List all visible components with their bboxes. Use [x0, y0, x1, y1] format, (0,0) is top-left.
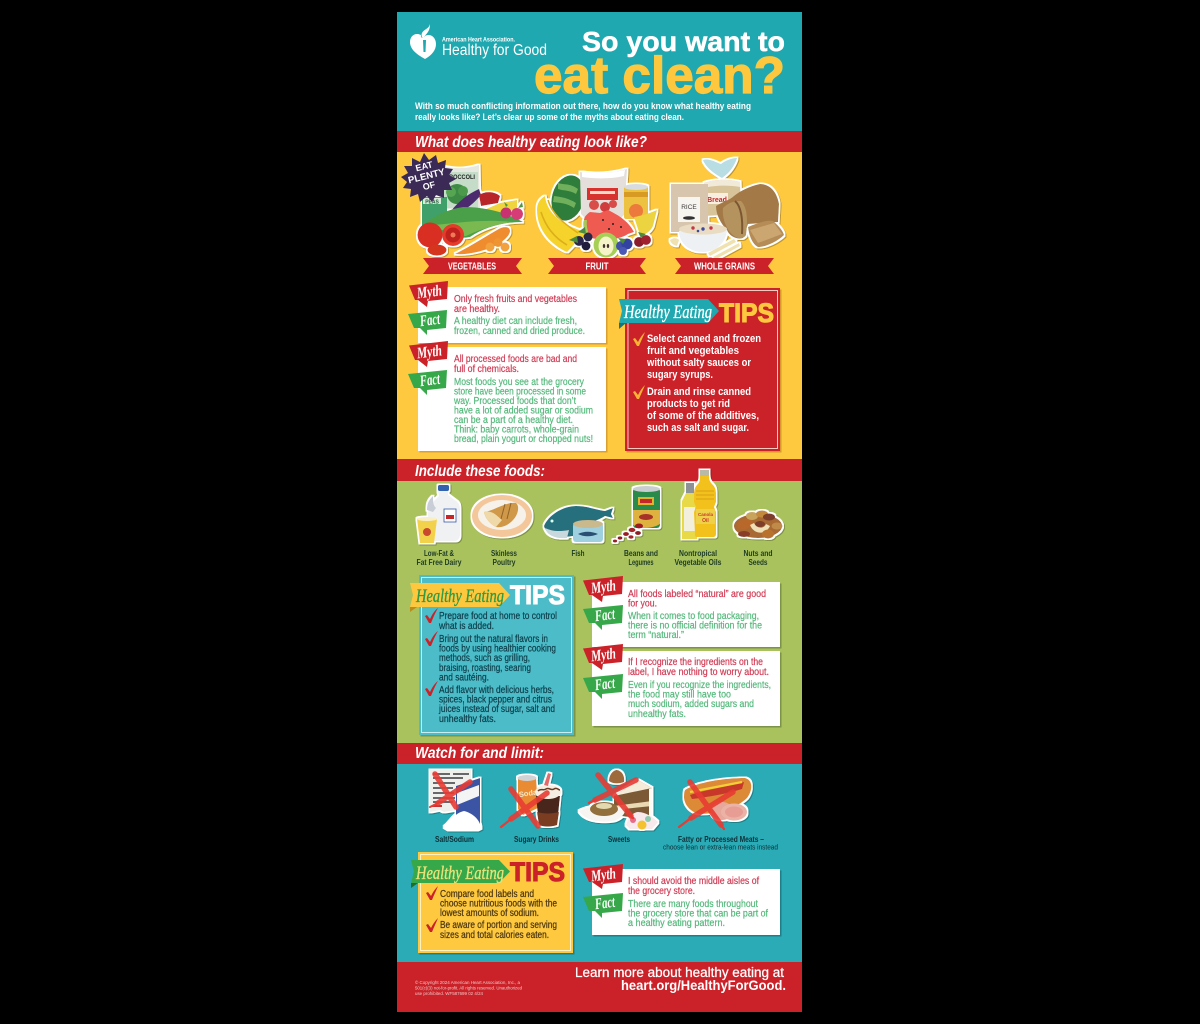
- card text: bread, plain yogurt or chopped nuts!: [454, 434, 593, 445]
- tips text: Compare food labels and: [440, 889, 534, 900]
- badge: eat plenty of: PLENTY: [407, 167, 447, 186]
- panel: myth fact card 2: [408, 341, 608, 452]
- call to action: heart.org/HealthyForGood.: [621, 978, 786, 993]
- section: watch for and limit: [397, 743, 802, 962]
- tips text: lowest amounts of sodium.: [440, 908, 539, 919]
- icon: beans: [613, 486, 660, 542]
- card text: [453, 354, 593, 445]
- tips text: [440, 889, 557, 941]
- card text: the food may still have too: [628, 690, 731, 700]
- tips text: such as salt and sugar.: [647, 422, 749, 434]
- ribbon: vegetables: VEGETABLES: [448, 262, 496, 272]
- myth flag: Myth: [589, 865, 617, 885]
- myth flag: Myth: [415, 282, 443, 302]
- red x: [679, 782, 733, 829]
- card text: [628, 589, 766, 641]
- myth flag: [409, 281, 448, 307]
- panel: tips red: [619, 288, 782, 452]
- labels: food names: Nontropical: [679, 548, 717, 558]
- icon: oils: Oil: [702, 518, 709, 524]
- fact flag: Fact: [418, 371, 441, 390]
- tips banner: TIPS: [719, 298, 774, 328]
- tips banner: [410, 580, 565, 612]
- card text: much sodium, added sugars and: [628, 699, 754, 710]
- labels: limit foods: Sugary Drinks: [514, 834, 559, 844]
- intro text: With so much conflicting information out there, how do you know what healthy eating: [415, 101, 751, 112]
- ribbon: vegetables: [423, 258, 522, 274]
- card text: All processed foods are bad and: [454, 354, 577, 365]
- tips banner: TIPS: [510, 580, 565, 610]
- ribbon: fruit: [548, 258, 646, 274]
- labels: food names: Fat Free Dairy: [416, 557, 462, 567]
- fact flag: Fact: [593, 606, 616, 625]
- card text: When it comes to food packaging,: [628, 611, 759, 622]
- logo text: [442, 36, 547, 59]
- card text: the grocery store.: [628, 886, 695, 897]
- fact flag: Fact: [418, 311, 441, 330]
- badge: eat plenty of: [401, 153, 456, 202]
- icon: vegetables: [418, 165, 523, 256]
- myth flag: [583, 644, 623, 670]
- icon: poultry: [472, 495, 532, 537]
- card text: for you.: [628, 598, 657, 610]
- card text: [628, 876, 768, 929]
- icon: whole grains: Bread: [707, 197, 727, 204]
- copyright: [415, 980, 523, 996]
- header panel: [397, 12, 802, 131]
- call to action: Learn more about healthy eating at: [575, 965, 784, 980]
- card text: way. Processed foods that don’t: [453, 396, 576, 407]
- tips text: Prepare food at home to control: [439, 611, 557, 622]
- tips text: Select canned and frozen: [647, 333, 761, 345]
- ribbon: fruit: FRUIT: [586, 262, 608, 272]
- labels: food names: Legumes: [628, 557, 654, 567]
- checks: [426, 886, 438, 932]
- tips text: and sautéing.: [439, 672, 489, 684]
- tips text: Be aware of portion and serving: [440, 920, 557, 931]
- tips text: what is added.: [438, 621, 494, 632]
- labels: food names: Seeds: [748, 557, 768, 567]
- icon: nuts: [734, 510, 782, 538]
- icon: vegetables: PEAS: [425, 200, 439, 206]
- card text: full of chemicals.: [454, 364, 519, 375]
- tips text: Drain and rinse canned: [647, 386, 751, 398]
- tips text: foods by using healthier cooking: [439, 644, 556, 654]
- labels: limit foods: choose lean or extra-lean meats instead: [663, 842, 778, 852]
- labels: limit foods: Sweets: [608, 834, 630, 844]
- panel: myth fact card 5: [583, 864, 782, 936]
- card text: If I recognize the ingredients on the: [628, 657, 763, 668]
- labels: food names: Poultry: [492, 557, 516, 567]
- card text: Most foods you see at the grocery: [454, 377, 584, 388]
- tips text: [646, 333, 761, 434]
- badge: eat plenty of: EAT: [414, 159, 434, 173]
- logo text: Healthy for Good: [442, 42, 547, 59]
- intro text: really looks like? Let’s clear up some of the myths about eating clean.: [415, 112, 684, 123]
- card text: the grocery store that can be part of: [628, 908, 768, 920]
- copyright: 501(c)(3) not-for-profit. All rights reserved. Unauthorized: [415, 986, 523, 990]
- myth flag: Myth: [589, 577, 617, 597]
- title: So you want to: [582, 26, 785, 57]
- myth flag: [583, 864, 623, 889]
- icon: fish: [544, 506, 613, 542]
- fact flag: [408, 310, 447, 335]
- copyright: use prohibited. WF587699 02 4/24: [415, 991, 484, 996]
- checks: [633, 332, 645, 399]
- tips text: unhealthy fats.: [439, 714, 496, 725]
- tips text: products to get rid: [647, 398, 730, 410]
- tips banner: TIPS: [510, 857, 565, 887]
- labels: limit foods: Fatty or Processed Meats –: [678, 834, 764, 844]
- tips text: without salty sauces or: [646, 357, 752, 369]
- tips banner: [411, 857, 565, 888]
- tips text: Add flavor with delicious herbs,: [439, 685, 554, 696]
- labels: food names: Vegetable Oils: [674, 557, 722, 567]
- card text: A healthy diet can include fresh,: [454, 316, 577, 327]
- tips banner: [619, 298, 774, 329]
- icon: whole grains: [670, 158, 784, 259]
- card text: There are many foods throughout: [628, 899, 758, 910]
- ribbon: whole grains: [675, 258, 774, 274]
- labels: food names: Beans and: [624, 548, 658, 558]
- card text: [454, 294, 585, 337]
- icon: vegetables: BROCCOLI: [445, 174, 475, 181]
- tips text: choose nutritious foods with the: [440, 898, 557, 910]
- icon: oils: [682, 470, 716, 539]
- tips text: fruit and vegetables: [647, 345, 739, 357]
- icon: sugary drinks: Soda: [518, 788, 538, 799]
- labels: food names: Nuts and: [744, 548, 772, 558]
- panel: tips teal: [410, 575, 576, 736]
- ribbon: whole grains: WHOLE GRAINS: [694, 262, 755, 272]
- tips text: Bring out the natural flavors in: [439, 634, 548, 645]
- tips text: juices instead of sugar, salt and: [438, 704, 555, 715]
- tips text: spices, black pepper and citrus: [439, 694, 552, 706]
- tips text: of some of the additives,: [647, 410, 759, 422]
- red x: [430, 774, 470, 807]
- badge: eat plenty of: OF: [422, 179, 437, 192]
- card text: Only fresh fruits and vegetables: [454, 294, 577, 305]
- labels: food names: Fish: [572, 548, 584, 558]
- card text: I should avoid the middle aisles of: [628, 876, 759, 887]
- myth flag: [409, 341, 448, 367]
- panel: myth fact card 3: [583, 576, 782, 648]
- icon: sugary drinks: [501, 773, 561, 827]
- red x: [501, 789, 547, 827]
- icon: sweets: [579, 770, 658, 830]
- icon: oils: Canola: [698, 512, 713, 517]
- card text: All foods labeled “natural” are good: [628, 589, 766, 600]
- fact flag: Fact: [593, 894, 616, 913]
- tips banner: Healthy Eating: [415, 586, 504, 607]
- card text: term “natural.”: [628, 630, 684, 641]
- labels: food names: [416, 548, 772, 567]
- labels: limit foods: [435, 834, 778, 852]
- fact flag: [583, 674, 623, 699]
- icon: dairy: [417, 485, 460, 543]
- card text: frozen, canned and dried produce.: [454, 326, 585, 337]
- card text: there is no official definition for the: [628, 620, 762, 632]
- red x: [589, 775, 636, 818]
- card text: [628, 657, 771, 720]
- card text: Think: baby carrots, whole-grain: [454, 424, 579, 436]
- card text: have a lot of added sugar or sodium: [454, 406, 593, 416]
- copyright: © Copyright 2024 American Heart Association, Inc., a: [415, 980, 521, 985]
- tips text: sugary syrups.: [647, 369, 713, 381]
- card text: can be a part of a healthy diet.: [454, 415, 573, 426]
- tips text: sizes and total calories eaten.: [440, 930, 549, 941]
- call to action: [575, 965, 786, 993]
- panel: tips yellow: [411, 852, 574, 954]
- icon: heart torch logo: [410, 24, 436, 59]
- footer: [397, 962, 802, 1012]
- labels: food names: Low-Fat &: [424, 548, 454, 558]
- myth flag: Myth: [415, 342, 443, 362]
- tips text: methods, such as grilling,: [439, 653, 530, 664]
- fact flag: [583, 893, 623, 918]
- card text: are healthy.: [454, 304, 500, 315]
- tips text: [438, 611, 557, 725]
- panel: myth fact card 4: [583, 644, 782, 728]
- fact flag: [583, 605, 623, 630]
- heading: Include these foods:: [415, 463, 545, 480]
- card text: Even if you recognize the ingredients,: [628, 680, 771, 691]
- fact flag: [408, 370, 447, 395]
- card text: store have been processed in some: [454, 386, 586, 398]
- tips banner: Healthy Eating: [623, 302, 712, 323]
- labels: food names: Skinless: [491, 548, 517, 558]
- card text: label, I have nothing to worry about.: [628, 667, 769, 678]
- title: eat clean?: [534, 47, 785, 105]
- fact flag: Fact: [593, 675, 616, 694]
- heading: Watch for and limit:: [415, 745, 544, 762]
- logo text: American Heart Association.: [442, 36, 515, 44]
- icon: whole grains: RICE: [681, 204, 697, 211]
- panel: myth fact card 1: [408, 281, 608, 344]
- checks: [425, 608, 438, 696]
- section: what does healthy eating look like: [397, 131, 802, 459]
- myth flag: Myth: [589, 645, 617, 665]
- section: include these foods: [397, 459, 802, 743]
- icon: fruit: [537, 169, 657, 258]
- card text: a healthy eating pattern.: [628, 918, 725, 929]
- heading: What does healthy eating look like?: [415, 134, 647, 151]
- tips banner: Healthy Eating: [415, 863, 504, 884]
- labels: limit foods: Salt/Sodium: [435, 834, 474, 844]
- tips text: braising, roasting, searing: [439, 663, 531, 674]
- icon: processed meats: [679, 778, 751, 829]
- intro text: [415, 101, 751, 123]
- myth flag: [583, 576, 623, 602]
- card text: unhealthy fats.: [628, 709, 686, 720]
- icon: salt: [430, 770, 481, 830]
